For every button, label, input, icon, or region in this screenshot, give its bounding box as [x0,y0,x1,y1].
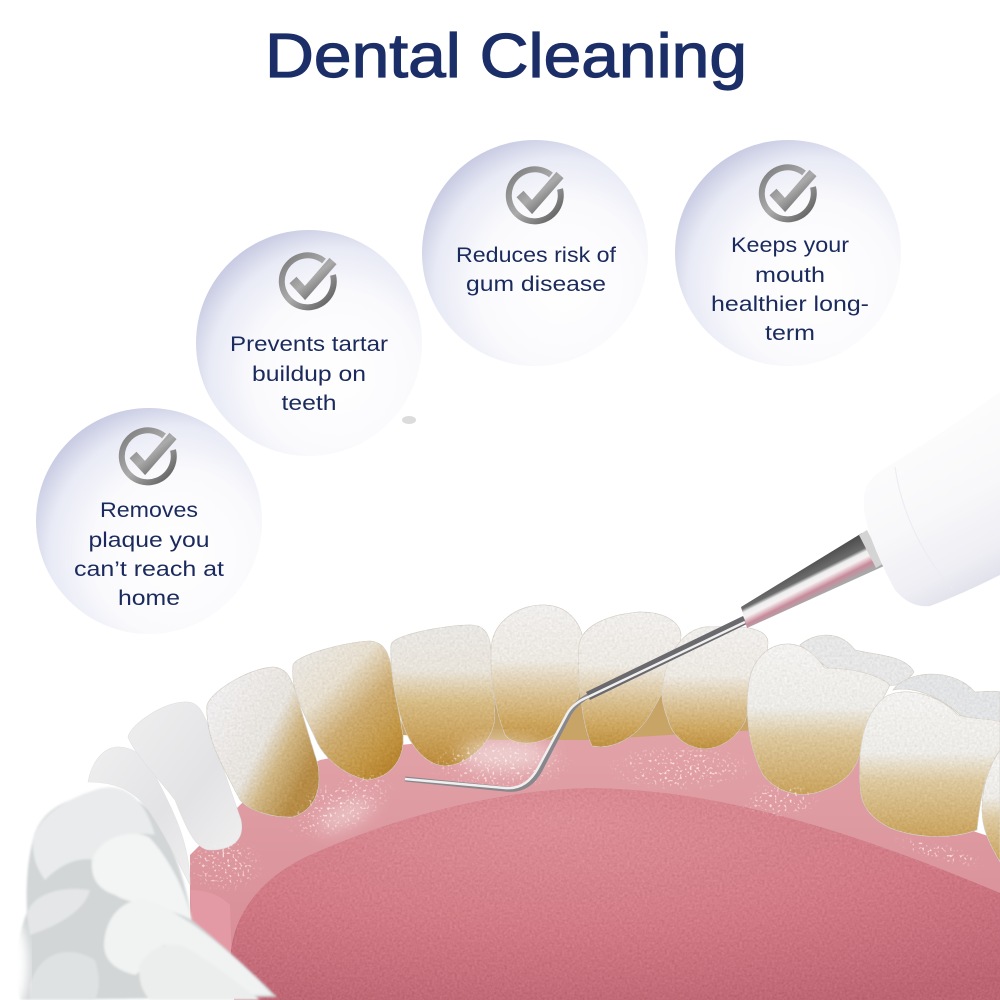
text: reduces risk [456,243,616,296]
text: keeps mouth healthier: term [765,321,815,345]
text: removes plaque: can’t reach at [74,557,224,581]
instrument: scaler tip [405,530,884,789]
icon: check mark [509,169,561,221]
text: prevents tartar [230,332,388,415]
text: reduces risk: Reduces risk of [456,243,616,267]
bubble: prevents tartar [196,230,422,456]
white front teeth left [88,702,242,885]
gums [190,718,1000,1000]
icon: check mark [282,255,334,307]
text: prevents tartar: buildup on [252,362,366,386]
title: Dental Cleaning [265,22,747,91]
back molars left [15,787,277,1000]
text: removes plaque: Removes [100,498,198,522]
bubble: removes plaque [36,408,262,634]
text: reduces risk: gum disease [466,272,606,296]
bubble: keeps mouth healthier [675,140,901,366]
plaque dust specks [185,739,991,893]
interdental shadow [400,680,760,740]
gum edge highlight [190,890,275,1000]
icon: check mark [762,167,814,219]
text: removes plaque: home [118,586,180,610]
handpiece body [864,392,1000,606]
plaque-stained teeth [207,605,1000,862]
text: keeps mouth healthier [711,233,869,345]
text: removes plaque [74,498,224,610]
text: removes plaque: plaque you [88,528,210,552]
icon: check mark [122,430,174,482]
bubble: reduces risk [422,140,648,366]
text: prevents tartar: Prevents tartar [230,332,388,356]
text: keeps mouth healthier: healthier long- [711,292,869,316]
needle and shaft [405,696,588,789]
text: keeps mouth healthier: mouth [755,263,825,287]
tongue [230,788,1000,1000]
smudge [402,416,416,424]
plaque dust haze [314,739,550,836]
illustration: mouth with stained teeth [0,605,1000,1000]
text: keeps mouth healthier: Keeps your [731,233,849,257]
thick sleeve [741,533,884,628]
text: prevents tartar: teeth [282,391,336,415]
soft fade at molar edge [0,915,28,1000]
